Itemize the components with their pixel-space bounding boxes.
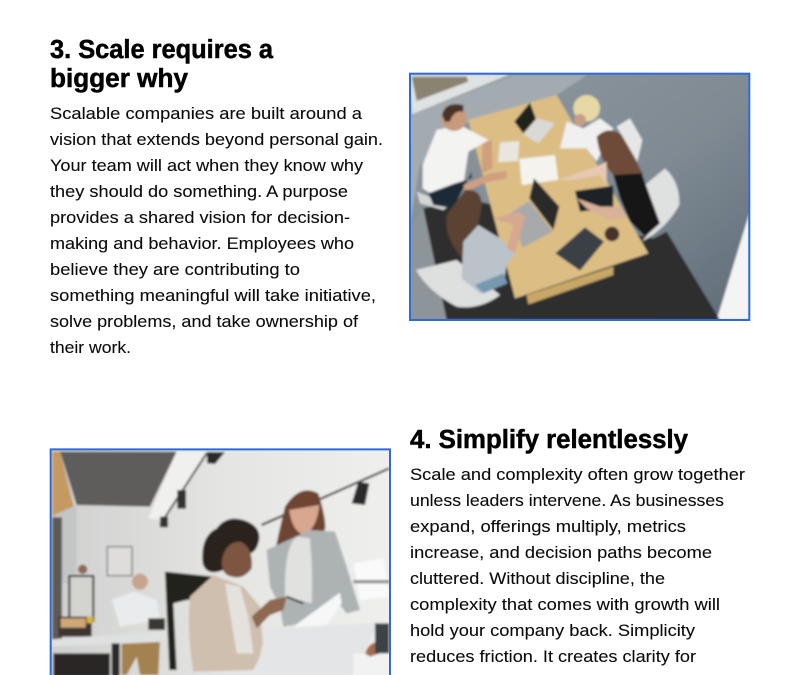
heading: section 3: bigger why (50, 65, 189, 93)
track lights (160, 453, 207, 525)
text block: section 4 body: complexity that comes with growth will (410, 596, 720, 614)
standing woman (275, 489, 327, 546)
text block: section 4 body: Scale and complexity often grow together (410, 466, 746, 484)
image border (51, 449, 390, 675)
text block: section 3 body: believe they are contributing to (50, 261, 300, 279)
document (293, 593, 342, 630)
text block: section 3 body: they should do something. A purpose (50, 183, 348, 201)
text block: section 3 body: vision that extends beyond personal gain. (50, 131, 383, 149)
text block: section 4 body: hold your company back. Simplicity (410, 622, 696, 640)
seated woman hair (202, 519, 259, 572)
chair (165, 572, 213, 670)
photo: two colleagues reviewing documents in an office (47, 447, 393, 675)
text block: section 3 body: Your team will act when they know why (50, 157, 364, 175)
shelf & background (78, 565, 87, 574)
text block: section 4 body: cluttered. Without discipline, the (410, 570, 665, 588)
text block: section 3 body: provides a shared vision for decision- (50, 209, 350, 227)
laptop (259, 624, 374, 656)
text block: section 3 body: solve problems, and take ownership of (50, 313, 358, 331)
text block: section 4 body: unless leaders intervene. As businesses (410, 492, 724, 510)
brunette woman right (597, 130, 643, 175)
woman at laptop (446, 190, 482, 262)
text block: section 3 body: something meaningful will take initiative, (50, 287, 376, 305)
front laptop (529, 178, 559, 230)
window glow (353, 558, 389, 600)
text block: section 3 body (50, 105, 383, 357)
text block: section 3 body: Scalable companies are built around a (50, 105, 363, 123)
photo: team meeting around a table seen from above (407, 72, 753, 325)
text block: section 4 body: increase, and decision paths become (410, 544, 712, 562)
text block: section 4 body: reduces friction. It creates clarity for (410, 648, 697, 666)
image border (410, 74, 749, 320)
man (423, 125, 488, 195)
laptop top (514, 103, 536, 133)
heading: section 3 (50, 36, 274, 93)
desk (52, 635, 160, 646)
ceiling panel (60, 452, 177, 507)
blonde woman (573, 95, 600, 122)
text block: section 4 body (410, 466, 746, 666)
heading: section 3: 3. Scale requires a (50, 36, 274, 64)
closed notebook and mug (555, 227, 604, 271)
background man (112, 592, 160, 627)
text block: section 3 body: their work. (50, 339, 131, 357)
text block: section 3 body: making and behavior. Employees who (50, 235, 354, 253)
papers (498, 141, 519, 162)
table (468, 95, 648, 298)
rug (423, 198, 720, 320)
seated woman blazer (189, 575, 263, 672)
chairs (617, 118, 642, 162)
heading: section 4: 4. Simplify relentlessly (410, 426, 689, 454)
wall frame (107, 547, 132, 576)
text block: section 4 body: expand, offerings multiply, metrics (410, 518, 686, 536)
